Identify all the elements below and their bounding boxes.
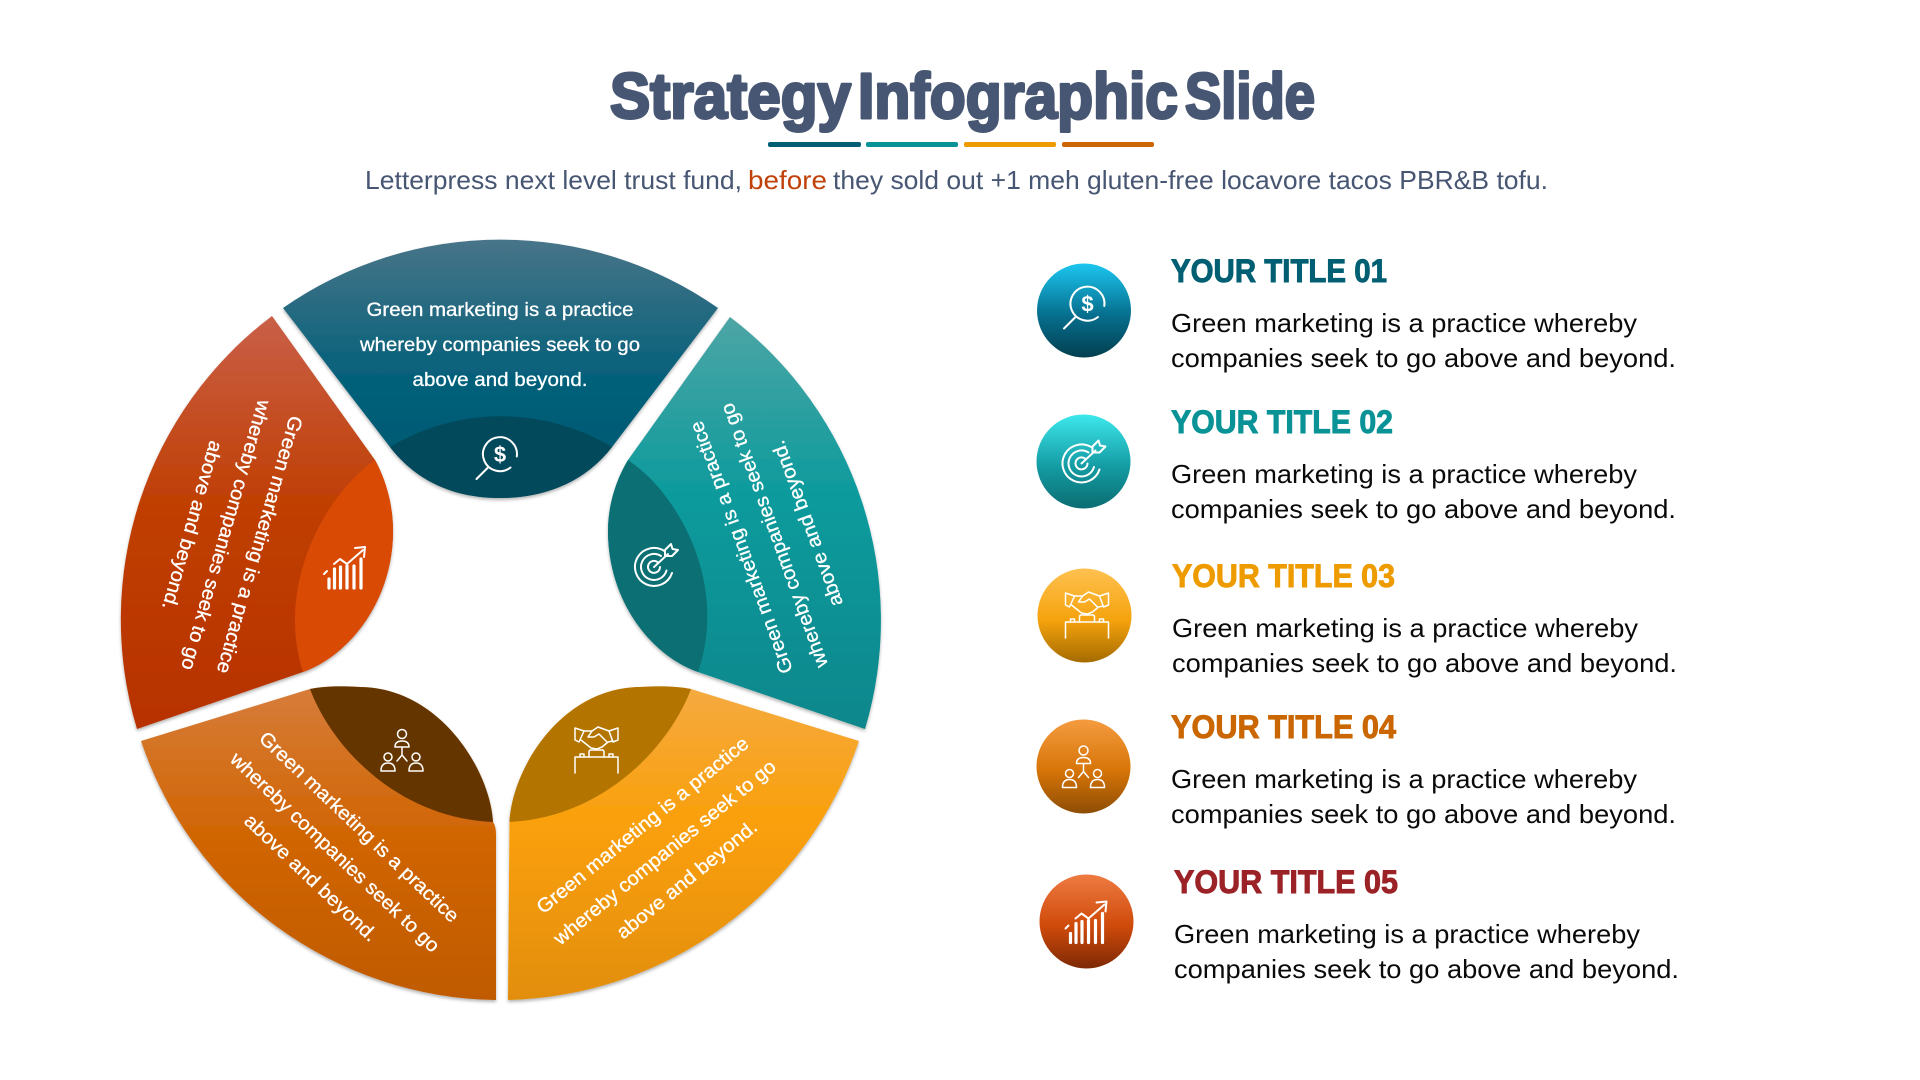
text: top segment: above and beyond.	[412, 369, 588, 391]
icon badge 01: $	[1081, 292, 1094, 316]
text: left segment	[143, 387, 309, 682]
text: right segment: Green marketing is a practice	[686, 418, 798, 676]
icon badge 05	[1040, 874, 1134, 968]
text: bottom right segment: whereby companies seek to go	[549, 756, 781, 950]
panel: left segment	[121, 316, 393, 729]
heading 03: YOUR TITLE 03	[1172, 558, 1395, 594]
icon: target	[635, 544, 678, 586]
text: left segment: Green marketing is a practice	[212, 413, 307, 676]
text: bottom left segment	[201, 722, 468, 983]
text block 05: Green marketing is a practice whereby	[1174, 919, 1640, 949]
text block 03	[1172, 613, 1677, 678]
text: bottom left segment: Green marketing is a practice	[254, 727, 463, 927]
title underline bars	[768, 142, 1154, 147]
text: bottom left segment: whereby companies seek to go	[225, 748, 444, 957]
heading 05: YOUR TITLE 05	[1174, 864, 1398, 900]
subtitle: they sold out +1 meh gluten-free locavore tacos PBR&B tofu.	[833, 165, 1548, 195]
subtitle: Letterpress next level trust fund,	[365, 165, 742, 195]
icon: growth chart	[324, 547, 365, 588]
subtitle: before	[748, 165, 827, 195]
title	[610, 60, 1315, 132]
icon badge 02	[1036, 414, 1130, 508]
text: bottom right segment: above and beyond.	[612, 816, 762, 944]
list item 02	[1036, 404, 1676, 524]
text block 02: companies seek to go above and beyond.	[1171, 494, 1676, 524]
panel: bottom left segment	[141, 686, 496, 1000]
text block 04: companies seek to go above and beyond.	[1171, 799, 1676, 829]
text: top segment	[359, 299, 640, 391]
icon: magnifier with dollar: $	[494, 442, 506, 467]
text: left segment: whereby companies seek to go	[176, 396, 275, 673]
text: bottom left segment: above and beyond.	[240, 810, 382, 946]
icon badge 03	[1038, 568, 1132, 662]
icon: team hierarchy	[381, 730, 423, 771]
list item 04	[1036, 709, 1676, 829]
text block 02	[1171, 459, 1676, 524]
list item 05	[1040, 864, 1679, 984]
panel: bottom right segment	[508, 686, 859, 1000]
text block 03: companies seek to go above and beyond.	[1172, 648, 1677, 678]
heading 01: YOUR TITLE 01	[1171, 253, 1387, 289]
text block 03: Green marketing is a practice whereby	[1172, 613, 1638, 643]
text: right segment	[684, 388, 866, 684]
text: left segment: above and beyond.	[157, 438, 227, 612]
title: Infographic	[858, 60, 1178, 132]
text: top segment: Green marketing is a practice	[366, 299, 634, 321]
text block 01: Green marketing is a practice whereby	[1171, 308, 1637, 338]
wheel diagram	[121, 240, 881, 1000]
icon badge 04	[1036, 720, 1130, 814]
text block 04	[1171, 764, 1676, 829]
text block 01: companies seek to go above and beyond.	[1171, 343, 1676, 373]
text: right segment: whereby companies seek to go	[716, 400, 833, 672]
text block 02: Green marketing is a practice whereby	[1171, 459, 1637, 489]
text: top segment: whereby companies seek to go	[359, 334, 640, 356]
text: bottom right segment: Green marketing is a practice	[532, 733, 753, 918]
heading 04: YOUR TITLE 04	[1171, 709, 1396, 745]
text: right segment: above and beyond.	[767, 437, 848, 609]
text block 01	[1171, 308, 1676, 373]
text: bottom right segment	[527, 728, 803, 977]
icon badge 01	[1037, 264, 1131, 358]
heading 02: YOUR TITLE 02	[1171, 404, 1393, 440]
panel: top segment	[283, 240, 718, 498]
list item 03	[1038, 558, 1677, 678]
text block 05	[1174, 919, 1679, 984]
text block 04: Green marketing is a practice whereby	[1171, 764, 1637, 794]
icon: handshake and briefcase	[575, 727, 618, 773]
title: Slide	[1185, 60, 1315, 132]
title: Strategy	[610, 60, 851, 132]
icon: magnifier with dollar	[476, 437, 517, 479]
subtitle	[365, 165, 1548, 195]
panel: right segment	[608, 317, 881, 729]
text block 05: companies seek to go above and beyond.	[1174, 954, 1679, 984]
list item 01	[1037, 253, 1676, 373]
